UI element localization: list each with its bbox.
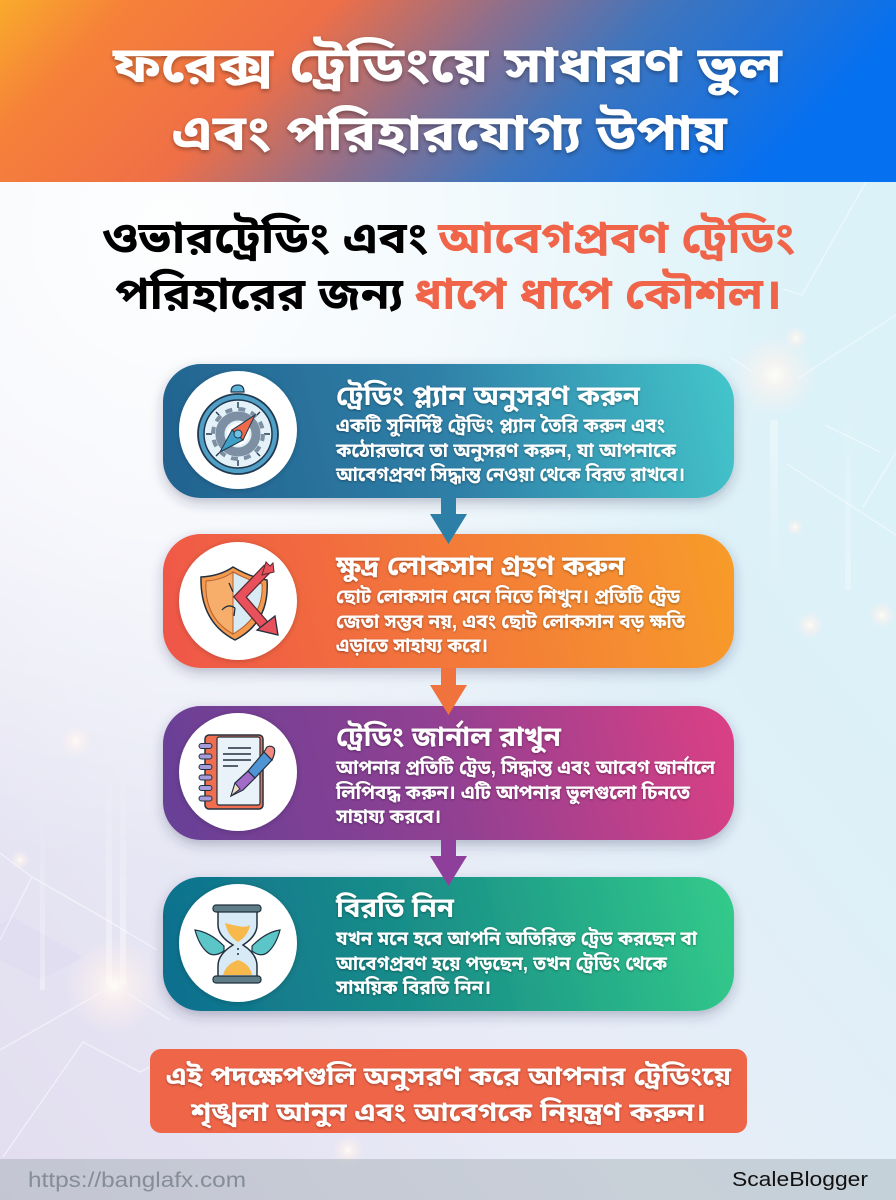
footer bar — [0, 1159, 896, 1200]
icon: cracked shield with down arrow — [179, 542, 297, 660]
heading: ক্ষুদ্র লোকসান গ্রহণ করুন — [335, 550, 626, 583]
body text: আপনার প্রতিটি ট্রেড, সিদ্ধান্ত এবং আবেগ জার্নালে — [335, 755, 716, 779]
body text: এড়াতে সাহায্য করে। — [336, 635, 488, 657]
title — [112, 35, 783, 161]
body text — [335, 926, 697, 999]
body text: লিপিবদ্ধ করুন। এটি আপনার ভুলগুলো চিনতে — [335, 780, 691, 805]
subtitle — [102, 212, 795, 319]
heading: বিরতি নিন — [335, 891, 455, 923]
body text — [335, 413, 685, 486]
callout: closing message: শৃঙ্খলা আনুন এবং আবেগকে নিয়ন্ত্রণ করুন। — [190, 1096, 706, 1129]
subtitle: পরিহারের জন্য — [115, 269, 404, 319]
body text: সাহায্য করবে। — [335, 806, 441, 828]
body text: যখন মনে হবে আপনি অতিরিক্ত ট্রেড করছেন বা — [335, 926, 697, 950]
body text: কঠোরভাবে তা অনুসরণ করুন, যা আপনাকে — [335, 438, 677, 462]
footer url: https://banglafx.com — [28, 1169, 246, 1192]
callout: closing message: এই পদক্ষেপগুলি অনুসরণ করে আপনার ট্রেডিংয়ে — [166, 1060, 732, 1093]
callout: closing message — [150, 1049, 747, 1133]
body text: সাময়িক বিরতি নিন। — [335, 975, 491, 999]
panel: step 3 keep trading journal — [163, 706, 734, 840]
header banner — [0, 0, 896, 182]
title: ফরেক্স ট্রেডিংয়ে সাধারণ ভুল — [112, 35, 783, 96]
body text — [335, 755, 716, 828]
arrow: step 2 to 3 — [430, 668, 467, 715]
body text: একটি সুনির্দিষ্ট ট্রেডিং প্ল্যান তৈরি করুন এবং — [336, 413, 665, 437]
panel: step 1 follow trading plan — [163, 364, 734, 498]
arrow: step 1 to 2 — [430, 498, 467, 544]
footer brand: ScaleBlogger — [732, 1169, 868, 1191]
heading: ট্রেডিং জার্নাল রাখুন — [336, 719, 562, 754]
body text: জেতা সম্ভব নয়, এবং ছোট লোকসান বড় ক্ষতি — [336, 609, 686, 633]
body text: আবেগপ্রবণ হয়ে পড়ছেন, তখন ট্রেডিং থেকে — [335, 951, 668, 975]
title: এবং পরিহারযোগ্য উপায় — [172, 104, 728, 161]
subtitle: ওভারট্রেডিং এবং — [102, 212, 428, 263]
subtitle: ধাপে ধাপে কৌশল। — [414, 268, 782, 319]
icon: notebook and pen — [179, 713, 297, 831]
body text — [336, 584, 686, 657]
heading: ট্রেডিং প্ল্যান অনুসরণ করুন — [336, 379, 641, 413]
body text: ছোট লোকসান মেনে নিতে শিখুন। প্রতিটি ট্রেড — [336, 584, 681, 608]
body text: আবেগপ্রবণ সিদ্ধান্ত নেওয়া থেকে বিরত রাখবে। — [335, 462, 685, 486]
icon: compass — [179, 371, 297, 489]
panel: step 4 take a break — [163, 877, 734, 1011]
subtitle: আবেগপ্রবণ ট্রেডিং — [437, 212, 795, 263]
icon: winged hourglass — [179, 884, 297, 1002]
panel: step 2 accept small losses — [163, 534, 734, 668]
arrow: step 3 to 4 — [430, 840, 467, 886]
